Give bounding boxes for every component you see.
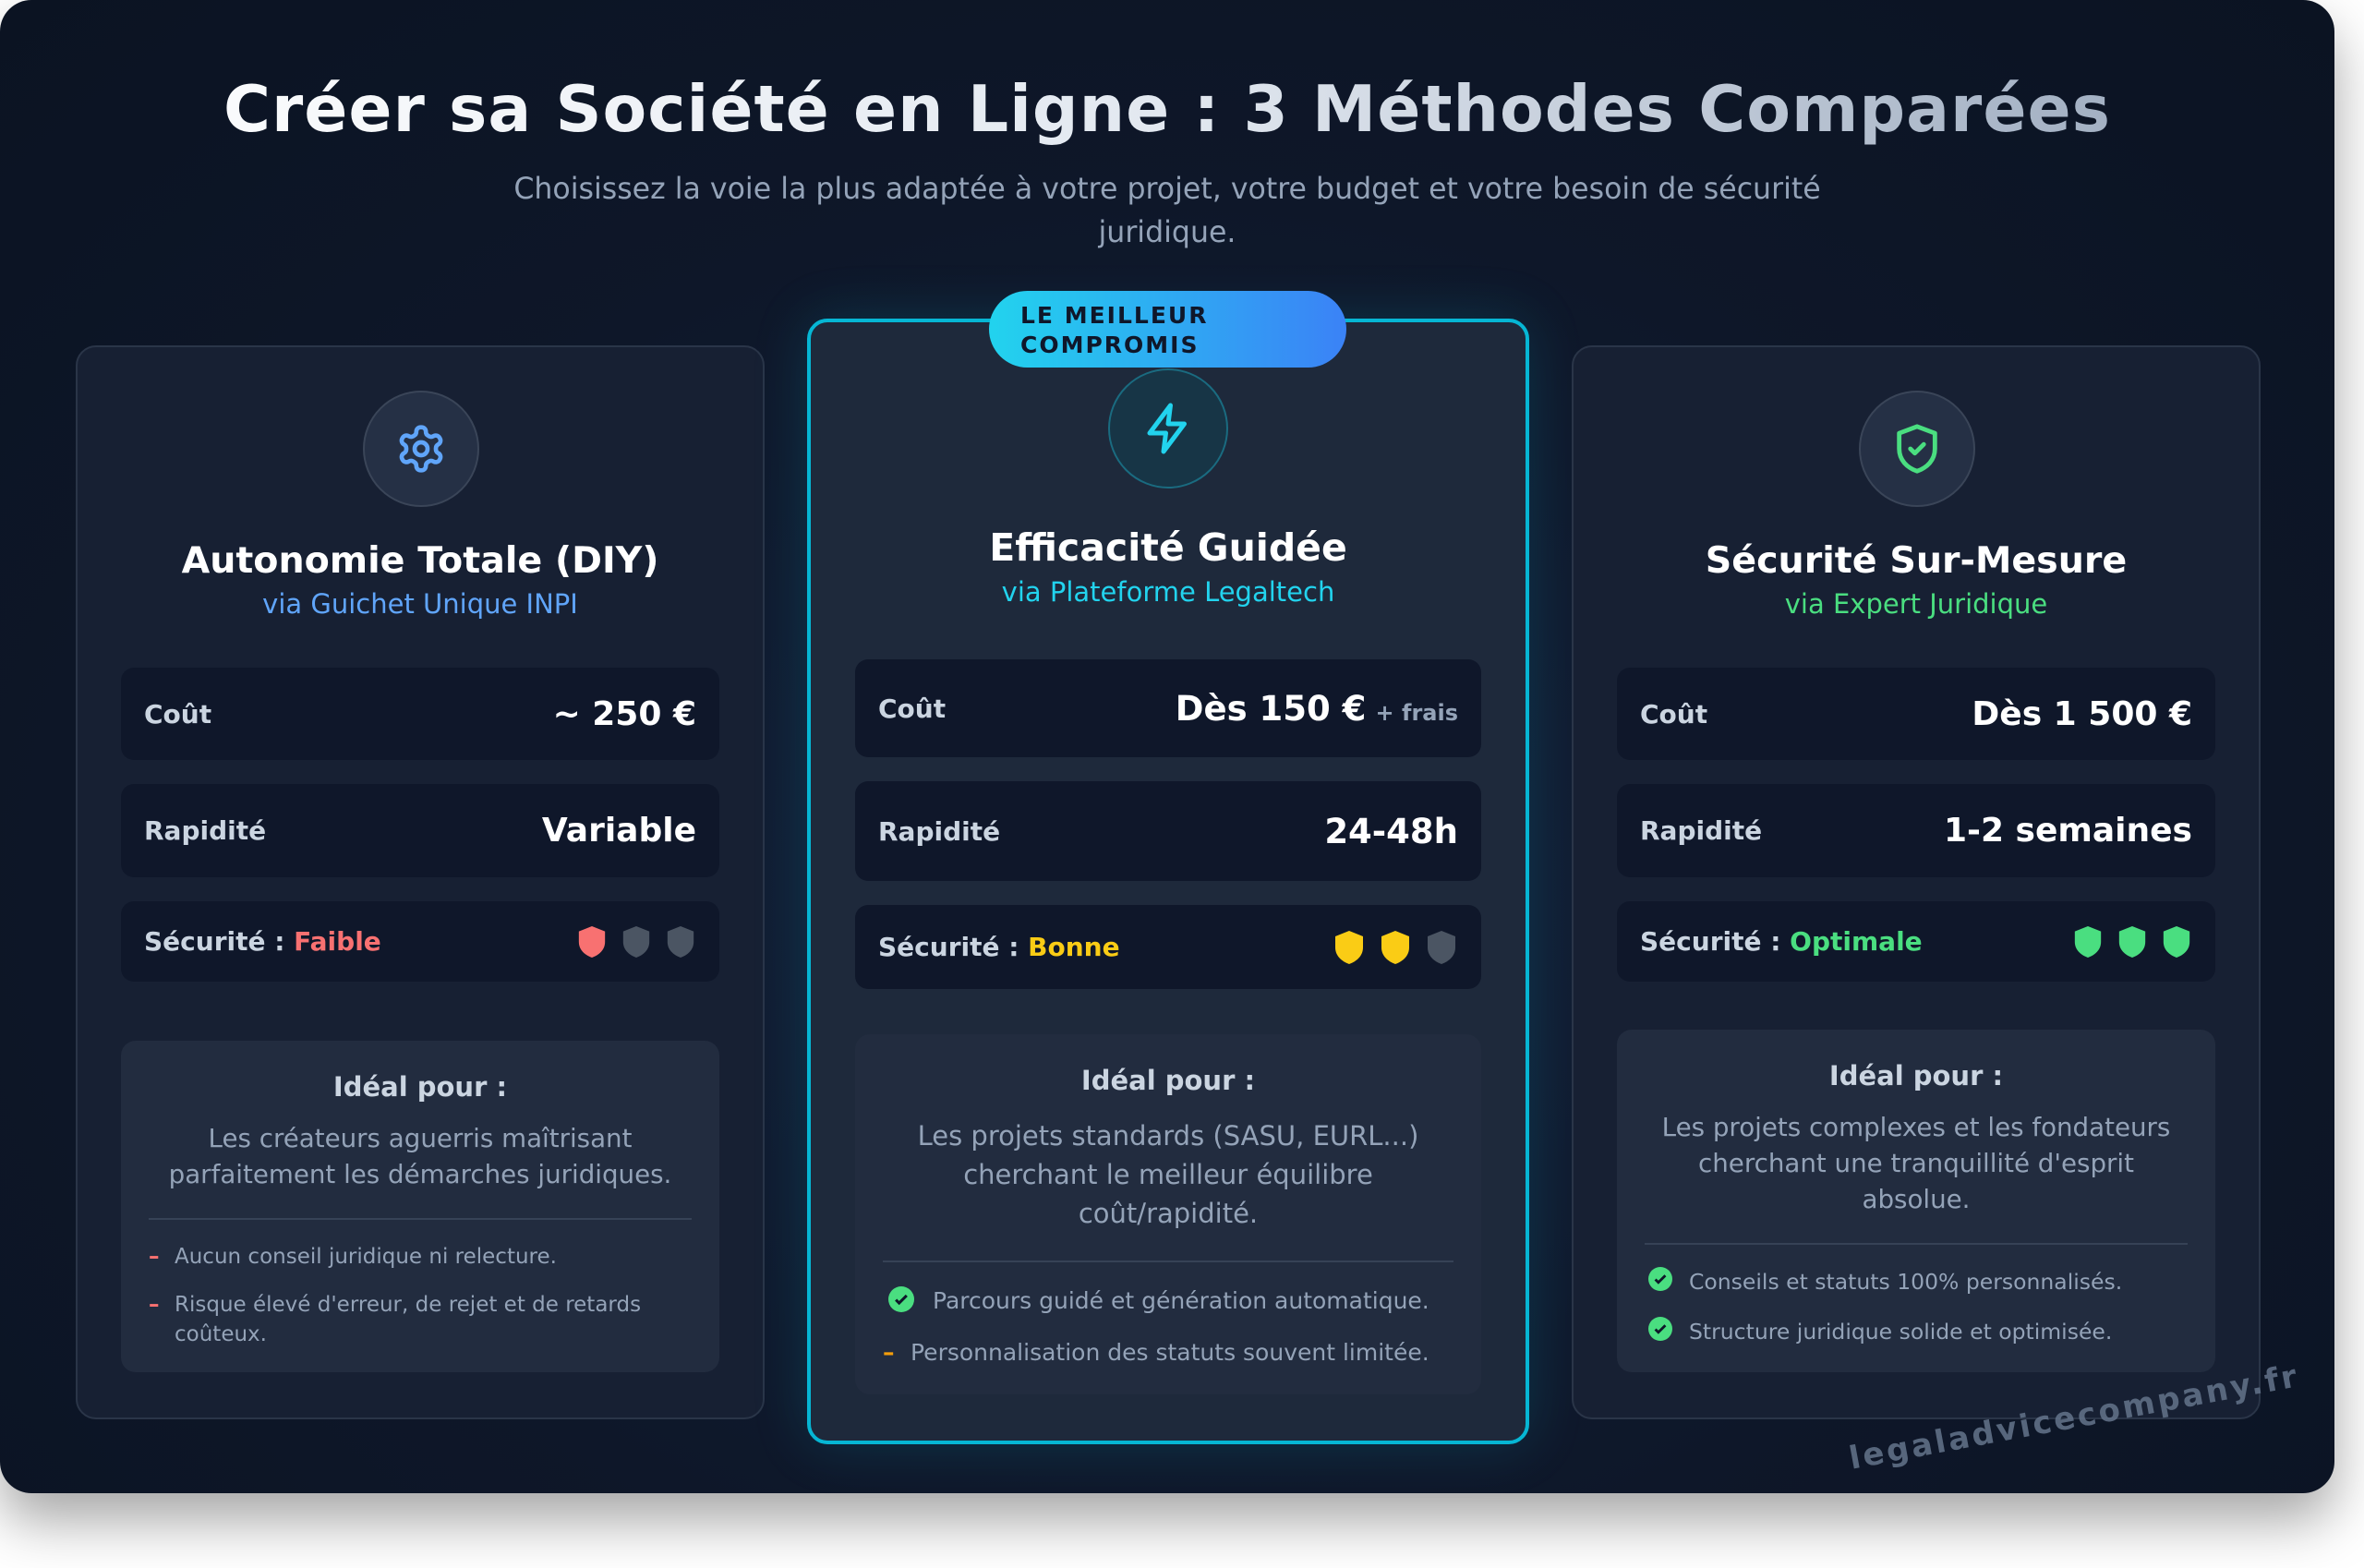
ideal box: Risque élevé d'erreur, de rejet et de retards coûteux. bbox=[175, 1293, 641, 1346]
row: security: Sécurité : Optimale bbox=[1640, 926, 1923, 957]
ideal box: Personnalisation des statuts souvent limitée. bbox=[911, 1339, 1429, 1366]
panel: DIY bbox=[76, 345, 765, 1419]
row: cost bbox=[1617, 668, 2215, 760]
ideal box: – bbox=[883, 1339, 894, 1366]
heading: Autonomie Totale (DIY) bbox=[182, 539, 658, 582]
row: cost bbox=[855, 659, 1481, 757]
badge: LE MEILLEUR bbox=[1020, 302, 1208, 329]
row: speed: 24-48h bbox=[1324, 811, 1458, 851]
row: cost: Coût bbox=[1640, 698, 1707, 730]
row: cost bbox=[121, 668, 719, 760]
ideal box: Les projets complexes et les fondateurs cherchant une tranquillité d'esprit absolue. bbox=[1662, 1112, 2170, 1214]
row: cost: Coût bbox=[878, 693, 946, 724]
heading: Efficacité Guidée bbox=[989, 525, 1347, 570]
icon: gear bbox=[363, 391, 479, 507]
sub heading: via Plateforme Legaltech bbox=[1002, 576, 1334, 608]
ideal box: Parcours guidé et génération automatique. bbox=[933, 1287, 1429, 1314]
row: cost: Dès 1 500 € bbox=[1972, 694, 2192, 733]
row: cost: ~ 250 € bbox=[553, 694, 696, 733]
row: speed bbox=[1617, 784, 2215, 877]
ideal box: – bbox=[149, 1293, 159, 1317]
ideal box bbox=[855, 1034, 1481, 1394]
ideal box: Les créateurs aguerris maîtrisant parfaitement les démarches juridiques. bbox=[169, 1123, 671, 1189]
ideal box: Aucun conseil juridique ni relecture. bbox=[175, 1245, 557, 1269]
row: security bbox=[121, 901, 719, 982]
row: cost: Dès 150 € + frais bbox=[1176, 689, 1458, 728]
row: cost: Coût bbox=[144, 698, 211, 730]
ideal box: Idéal pour : bbox=[1829, 1060, 2003, 1092]
row: security: Sécurité : Faible bbox=[144, 926, 381, 957]
row: speed bbox=[855, 781, 1481, 881]
row: speed: Variable bbox=[542, 812, 696, 850]
row: speed: Rapidité bbox=[144, 815, 266, 846]
row: security bbox=[1617, 901, 2215, 982]
subtitle: Choisissez la voie la plus adaptée à votre projet, votre budget et votre besoin de sécurité juridique. bbox=[513, 173, 1821, 249]
row: speed bbox=[121, 784, 719, 877]
ideal box: Les projets standards (SASU, EURL...) cherchant le meilleur équilibre coût/rapidité. bbox=[918, 1120, 1418, 1229]
row: speed: Rapidité bbox=[878, 816, 1000, 846]
badge: COMPROMIS bbox=[1020, 332, 1199, 358]
title: Créer sa Société en Ligne : 3 Méthodes Comparées bbox=[223, 72, 2111, 147]
row: speed: 1-2 semaines bbox=[1944, 812, 2192, 850]
sub heading: via Expert Juridique bbox=[1785, 588, 2047, 620]
ideal box: – bbox=[149, 1245, 159, 1269]
watermark: legaladvicecompany.fr bbox=[1846, 1357, 2302, 1478]
ideal box: Idéal pour : bbox=[1081, 1065, 1255, 1096]
ideal box bbox=[1617, 1030, 2215, 1372]
heading: Sécurité Sur-Mesure bbox=[1706, 539, 2127, 582]
sub heading: via Guichet Unique INPI bbox=[262, 588, 578, 620]
icon: lightning bbox=[1108, 368, 1228, 488]
row: security: Sécurité : Bonne bbox=[878, 932, 1120, 962]
icon: shield check bbox=[1859, 391, 1975, 507]
row: security bbox=[855, 905, 1481, 989]
ideal box: Idéal pour : bbox=[333, 1071, 507, 1103]
ideal box: Conseils et statuts 100% personnalisés. bbox=[1689, 1269, 2122, 1295]
ideal box bbox=[121, 1041, 719, 1372]
badge bbox=[989, 291, 1346, 368]
panel: Expert bbox=[1572, 345, 2261, 1419]
row: speed: Rapidité bbox=[1640, 815, 1762, 846]
ideal box: Structure juridique solide et optimisée. bbox=[1689, 1319, 2112, 1345]
panel: Legaltech bbox=[807, 319, 1529, 1444]
